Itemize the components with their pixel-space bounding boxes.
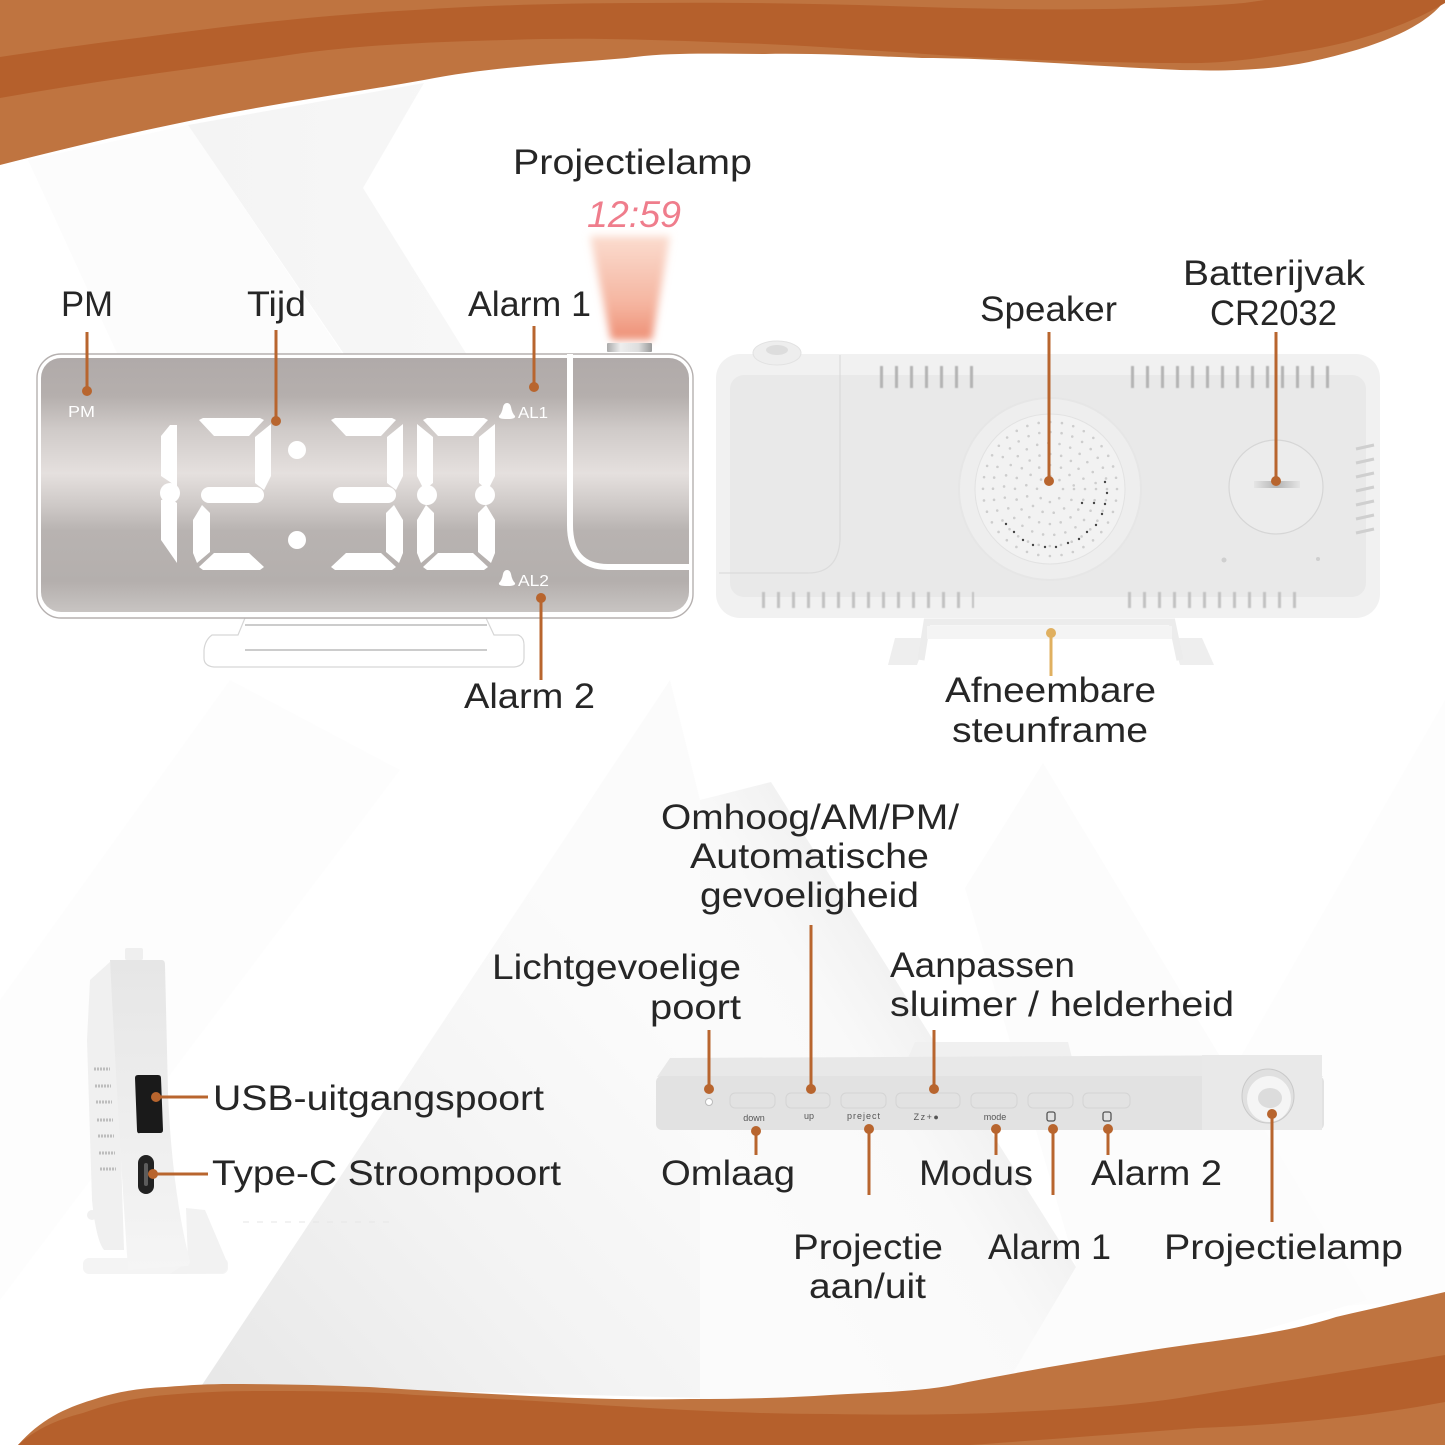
lamp housing section [1202,1055,1322,1130]
mirror display [41,358,689,612]
label: Projectie: Projectie [793,1228,943,1267]
panel: clock back view [716,341,1380,665]
label: Speaker: Speaker [980,290,1117,329]
side main face [110,960,190,1270]
label: Aanpassen: Aanpassen [890,946,1075,985]
light sensor [706,1098,712,1106]
projection beam [590,236,670,340]
side right foot [170,1208,227,1274]
colon [288,441,306,549]
leader: Tijd [271,330,281,426]
back body [716,354,1380,618]
leader: Afneembare steunframe [1046,628,1056,676]
front face [656,1076,1324,1130]
label: Type-C Stroompoort: Type-C Stroompoort [212,1154,561,1193]
button labels: Zz+● [914,1112,940,1122]
side top notch [125,948,143,960]
label: PM: PM [61,285,113,324]
label: USB-uitgangspoort: USB-uitgangspoort [213,1079,544,1118]
leader: Lichtgevoelige poort [704,1030,714,1094]
battery compartment [1229,440,1323,534]
button labels: mode [984,1112,1006,1122]
digit 1: seven-segment display showing 12:30 [160,418,495,570]
label: Tijd: Tijd [247,285,306,324]
projector lens knob [753,341,801,365]
label: steunframe: steunframe [952,711,1148,750]
top surface [657,1055,1323,1077]
labels [61,143,1403,1306]
label: CR2032: CR2032 [1210,294,1337,333]
label: Alarm 2: Alarm 2 [464,677,595,716]
label: Batterijvak: Batterijvak [1183,254,1366,293]
side base [83,1258,228,1274]
panel: clock side view [83,948,390,1274]
label: Automatische: Automatische [690,837,929,876]
leader lines [82,326,1281,1222]
leader: Speaker [1044,332,1054,486]
back inner panel [730,375,1366,597]
label: Alarm 1 button: Alarm 1 [988,1228,1111,1267]
screws [1222,557,1320,562]
buttons [730,1093,1130,1108]
leader: Omlaag [751,1126,761,1155]
projection lamp knob [1242,1069,1294,1123]
leader: PM [82,332,92,396]
Type-C port [138,1155,154,1194]
label: poort: poort [650,988,741,1027]
side rear housing [87,962,124,1250]
digit 0 [417,418,495,570]
leader: USB [151,1092,208,1102]
label: aan/uit: aan/uit [809,1267,926,1306]
alarm 1 indicator [499,403,548,422]
side vents [1356,445,1374,533]
PM indicator: PM [68,404,95,421]
digit 2 [193,418,271,570]
leader: Alarm 2 [536,593,546,680]
digit 3 [331,418,403,570]
leader: Modus [991,1124,1001,1155]
label: Modus: Modus [919,1154,1033,1193]
vents [762,377,1340,600]
leader: Projectielamp knob [1267,1109,1277,1222]
bottom brown wave banner [18,1292,1445,1445]
leader: Alarm 1 button [1048,1124,1058,1195]
label: Omhoog/AM/PM/: Omhoog/AM/PM/ [661,798,959,837]
label: Projectielamp knob: Projectielamp [1164,1228,1403,1267]
button labels: down [743,1113,765,1123]
stand [204,618,524,667]
alarm 2 button icon [1103,1112,1111,1121]
label: Alarm 1: Alarm 1 [468,285,591,324]
leader: Alarm 2 button [1103,1124,1113,1155]
clock body [37,354,693,618]
button labels [743,1111,1006,1123]
leader: Omhoog [806,925,816,1094]
label: gevoeligheid: gevoeligheid [700,876,919,915]
panel: clock front view [37,194,693,667]
leader: Aanpassen [929,1030,939,1094]
back stand [888,622,1214,665]
leader: Alarm 1 [529,326,539,392]
label: Lichtgevoelige: Lichtgevoelige [492,948,741,987]
label: Alarm 2 button: Alarm 2 [1091,1154,1222,1193]
projector bump [908,1042,1072,1058]
side small knob [87,1210,97,1220]
projector lens [607,343,652,352]
button labels: up [804,1111,814,1121]
label: sluimer / helderheid: sluimer / helderheid [890,985,1234,1024]
label: Omlaag: Omlaag [661,1154,795,1193]
leader: Type-C [148,1169,208,1179]
vents [703,1056,1162,1072]
alarm 2 indicator: AL2 [518,573,549,590]
alarm 1 button icon [1047,1112,1055,1121]
button labels: preject [847,1111,881,1121]
label: Afneembare: Afneembare [945,671,1156,710]
panel: clock top button view [656,1042,1324,1130]
top brown wave banner [0,0,1445,165]
faint dashes under label [243,1221,390,1223]
leader: Projectie [864,1124,874,1195]
projector cover outline [719,355,840,573]
label: Projectielamp: Projectielamp [513,143,752,182]
leader: Batterijvak [1271,332,1281,486]
projected time: 12:59 [587,194,681,235]
alarm 2 indicator [499,570,549,590]
speaker grille [959,398,1141,580]
side vents [94,1069,116,1169]
USB port [135,1075,163,1133]
alarm 1 indicator: AL1 [518,405,548,422]
projector panel divider [570,354,692,567]
